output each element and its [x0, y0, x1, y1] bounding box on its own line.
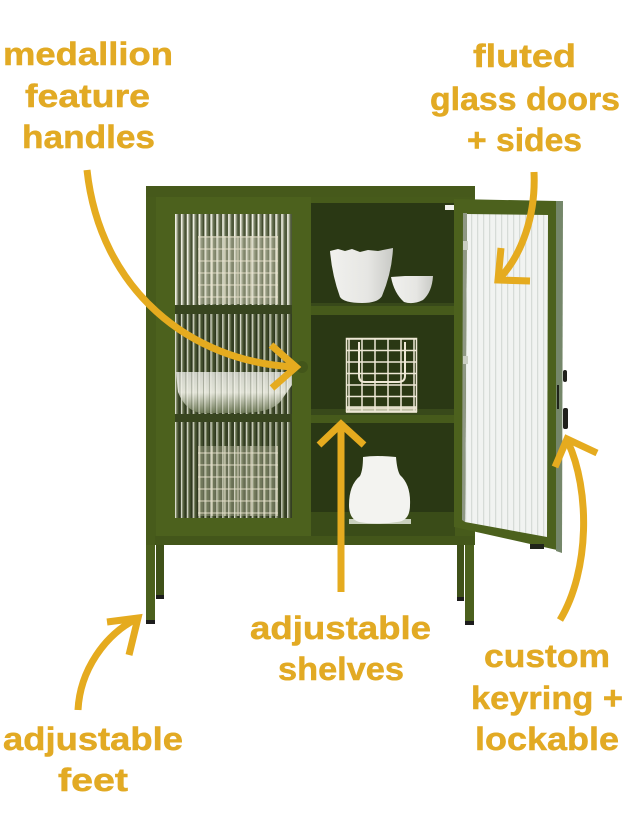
white vase: [349, 456, 411, 524]
label: adjustable shelves: shelves: [278, 651, 404, 687]
label: fluted glass doors + sides: + sides: [467, 122, 582, 158]
bottom shelf surface: [311, 512, 455, 536]
shelf: upper: [311, 303, 455, 315]
back legs: [156, 545, 464, 601]
label: adjustable shelves: [250, 610, 431, 687]
arrow: medallion handles: [87, 170, 296, 388]
cabinet body: [146, 186, 475, 545]
white bowl: [391, 276, 433, 303]
label: fluted glass doors + sides: glass doors: [430, 81, 620, 117]
door hinges: [445, 205, 468, 364]
door latch plate: [530, 544, 544, 549]
label: custom keyring + lockable: [471, 638, 623, 757]
label: medallion feature handles: medallion: [3, 36, 173, 72]
door fluted glass: [465, 214, 548, 537]
label: fluted glass doors + sides: [430, 38, 620, 158]
label: medallion feature handles: feature: [25, 78, 150, 114]
label: custom keyring + lockable: keyring +: [471, 680, 623, 716]
white crumpled vase: [330, 248, 393, 303]
wire basket: [346, 338, 417, 413]
label: adjustable shelves: adjustable: [250, 610, 431, 646]
lock hardware: [557, 370, 568, 429]
refracted bowl: [176, 372, 292, 413]
open door: [445, 199, 568, 553]
label: medallion feature handles: handles: [22, 119, 155, 155]
bottom rail: [155, 536, 474, 545]
label: fluted glass doors + sides: fluted: [473, 38, 576, 74]
label: custom keyring + lockable: custom: [484, 638, 610, 674]
top panel edge: [146, 186, 475, 197]
refracted basket bottom: [198, 446, 278, 516]
cabinet: [146, 186, 568, 625]
arrow: adjustable shelves: [319, 424, 364, 592]
refracted basket top: [198, 236, 278, 304]
arrow: fluted glass: [498, 172, 534, 281]
label: adjustable feet: feet: [58, 762, 128, 798]
label: medallion feature handles: [3, 36, 173, 155]
label: adjustable feet: adjustable: [3, 721, 183, 757]
door edge strip: [556, 201, 563, 553]
shelf: lower: [311, 409, 455, 423]
fluted glass: [175, 214, 292, 518]
arrow: adjustable feet: [78, 618, 138, 710]
medallion handle: [296, 361, 308, 373]
label: custom keyring + lockable: lockable: [475, 721, 619, 757]
closed door: [156, 197, 311, 536]
arrow: keyring: [555, 439, 597, 620]
interior: [311, 203, 455, 536]
label: adjustable feet: [3, 721, 183, 798]
front legs: [146, 545, 474, 625]
